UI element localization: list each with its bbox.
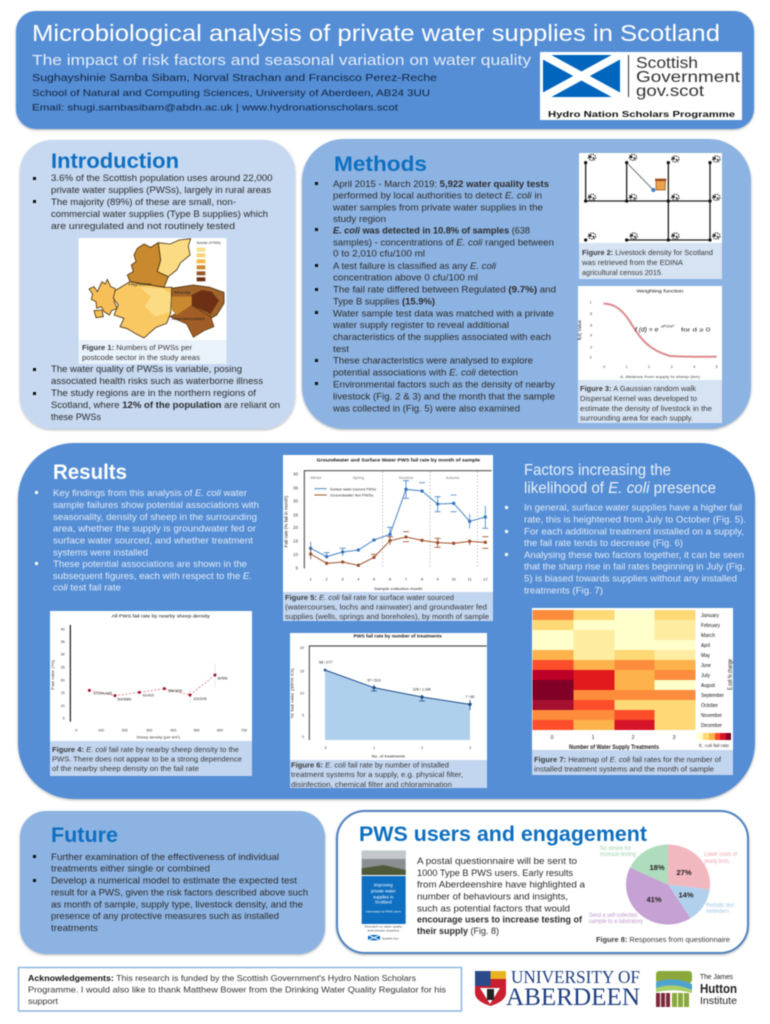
text: methods bullets: potential associations with E. coli detection (333, 368, 518, 378)
figure 6: area chart of fail rate by number of treatments: 58 / 277 (319, 661, 332, 665)
figure 3: weighting function chart: 4 (693, 365, 695, 369)
figure 4: fail rate by sheep density: 54/580 (117, 697, 131, 701)
figure 4: fail rate by sheep density: 600 (217, 728, 223, 732)
figure 7: heatmap by month and number of treatments: 3 (672, 735, 676, 741)
text: future bullets: treatments either single or combined (51, 864, 210, 874)
figure 5: line chart of fail rate by month: 11 (468, 577, 473, 582)
image: survey booklet cover: and private supplies (367, 929, 400, 932)
text: results bullets: surface water sourced, and whether treatment (53, 535, 253, 545)
text: methods bullets: characteristics of the supplies associated with each (333, 332, 551, 342)
image: survey booklet cover (362, 851, 406, 940)
figure 7: heatmap by month and number of treatments: April (701, 643, 710, 649)
figure 7: heatmap by month and number of treatments: February (701, 623, 720, 629)
figure 4: fail rate by sheep density: 40 (61, 628, 65, 632)
caption: figure 4: PWS. There does not appear to be a strong dependence (52, 754, 242, 764)
figure 5: line chart of fail rate by month: Fail rate (% fail in month) (283, 495, 288, 547)
text: results bullets (35, 488, 259, 593)
figure 5: line chart of fail rate by month: Winter (310, 475, 322, 480)
figure 3: weighting function chart: f (d) = e (635, 327, 659, 334)
figure 5: line chart of fail rate by month (283, 455, 493, 592)
logo: Scottish Government and Hydro Nation Scholars Programme (540, 52, 742, 120)
text: methods bullets: These characteristics were analysed to explore (333, 356, 533, 366)
figure 5: line chart of fail rate by month: 8 (421, 577, 424, 582)
image: survey booklet cover: Research on water quality (365, 926, 403, 929)
figure 3: weighting function chart: .4 (589, 334, 592, 338)
caption: figure 5 (283, 592, 493, 621)
image: survey booklet cover: Information for PWS users (366, 909, 401, 913)
caption: figure 3: surrounding area for each supply. (580, 414, 693, 422)
figure 3: weighting function chart: 0 (590, 355, 592, 359)
caption: figure 6: disinfection, chemical filter and chloramination (291, 780, 452, 789)
figure 1: map of PWSs per postcode sector: Aberdeenshire (172, 316, 206, 321)
figure 1: map of PWSs per postcode sector: Highland (128, 281, 151, 286)
figure 6: area chart of fail rate by number of treatments: PWS fail rate by number of treatments (353, 634, 442, 639)
figure 6: area chart of fail rate by number of treatments: 128 / 1,166 (413, 688, 431, 692)
text: introduction bullets top: 3.6% of the Scottish population uses around 22,000 (51, 173, 272, 183)
panel: future (20, 811, 325, 954)
text: methods bullets: Environmental factors such as the density of nearby (333, 380, 555, 390)
text: results bullets: subsequent figures, each with respect to the E. (53, 571, 252, 581)
panel: results (18, 443, 755, 799)
figure 4: fail rate by sheep density: 22/226 (193, 697, 207, 701)
caption: figure 8: Figure 8: Responses from questionnaire (596, 935, 730, 944)
figure 3: weighting function chart: .6 (589, 324, 592, 328)
figure 3: weighting function chart: 1 (626, 365, 628, 369)
caption: figure 6 (290, 760, 487, 789)
caption: figure 1 (78, 340, 226, 364)
figure 4: fail rate by sheep density: 700 (241, 728, 247, 732)
figure 7: heatmap by month and number of treatments: E.coli % change (728, 659, 734, 690)
caption: figure 3 (578, 380, 722, 423)
text: introduction bullets bottom: The study regions are in the northern regions of (51, 388, 256, 398)
caption: figure 3: Dispersal Kernel was developed to (580, 394, 697, 403)
figure 6: area chart of fail rate by number of treatments: 20 (300, 646, 304, 650)
text: methods bullets (315, 179, 556, 413)
figure 4: fail rate by sheep density: 10 (61, 704, 65, 708)
affiliation: School of Natural and Computing Sciences, University of Aberdeen, AB24 3UU (32, 88, 430, 99)
text: questionnaire description (417, 856, 586, 936)
figure 5: line chart of fail rate by month: 3 (342, 577, 345, 582)
figure 4: fail rate by sheep density: 25 (61, 666, 65, 670)
figure 5: line chart of fail rate by month: 2 (326, 577, 329, 582)
caption: figure 7: installed treatment systems and the month of sample (534, 764, 714, 774)
text: results bullets: seasonality, density of sheep in the surrounding (53, 512, 257, 522)
heading: factors increasing E. coli (524, 462, 716, 497)
figure 6: area chart of fail rate by number of treatments: No. of treatments (372, 755, 405, 759)
figure 7: heatmap by month and number of treatments: October (701, 703, 718, 709)
text: results bullets: coli test fail rate (53, 583, 121, 593)
figure 7: heatmap by month and number of treatments: Number of Water Supply Treatments (569, 744, 659, 751)
logo: Scottish Government and Hydro Nation Scholars Programme: gov.scot (636, 83, 705, 100)
text: methods bullets: was collected in (Fig. 5) were also examined (332, 403, 520, 413)
figure 4: fail rate by sheep density: 41/410 (143, 694, 154, 698)
heading: methods: Methods (334, 153, 427, 176)
caption: figure 7 (532, 750, 733, 775)
text: methods bullets: water samples from private water supplies in the (332, 203, 543, 213)
figure 7: heatmap by month and number of treatments: August (701, 683, 715, 689)
figure 8: pie chart of questionnaire responses: 27% (676, 868, 692, 877)
figure 4: fail rate by sheep density: Sheep density (per km²) (137, 736, 180, 740)
text: introduction bullets bottom (33, 364, 280, 422)
figure 4: fail rate by sheep density: 400 (170, 728, 176, 732)
text: factors bullets: 5) is biased towards supplies without any installed (524, 574, 737, 584)
text: factors bullets: For each additional treatment installed on a supply, (524, 526, 744, 536)
figure 8: pie chart of questionnaire responses: No desire for (600, 846, 631, 852)
figure 5: line chart of fail rate by month: 30 (293, 499, 299, 504)
text: methods bullets: study region (333, 214, 386, 224)
figure 6: area chart of fail rate by number of treatments: 10 (300, 691, 304, 695)
caption: figure 5: Figure 5: E. coli fail rate for surface water sourced (285, 593, 454, 602)
text: methods bullets: April 2015 - March 2019: 5,922 water quality tests (333, 179, 549, 189)
text: methods bullets: Type B supplies (15.9%) (333, 297, 435, 307)
text: methods bullets: performed by local authorities to detect E. coli in (333, 191, 542, 201)
figure 8: pie chart of questionnaire responses: Send a self-collected (589, 913, 637, 919)
figure 4: fail rate by sheep density: 30 (61, 653, 65, 657)
figure 7: heatmap by month and number of treatments: March (701, 633, 715, 639)
figure 7: heatmap by month and number of treatments: December (701, 723, 722, 729)
figure 4: fail rate by sheep density: 15 (61, 691, 65, 695)
figure 3: weighting function chart: 3 (671, 365, 673, 369)
figure 6: area chart of fail rate by number of treatments: 15 (300, 669, 304, 673)
figure 4: fail rate by sheep density: 300 (146, 728, 152, 732)
logo: James Hutton Institute: Hutton (700, 981, 737, 996)
text: factors bullets: the fail rate tends to decrease (Fig. 6) (524, 538, 683, 548)
text: methods bullets: E. coli was detected in 10.8% of samples (638 (333, 225, 530, 235)
figure 3: weighting function chart: -d²/2σ² (660, 325, 675, 329)
figure 5: line chart of fail rate by month: Groundwater fed PWSs (330, 494, 374, 498)
figure 4: fail rate by sheep density: 200 (122, 728, 128, 732)
text: factors bullets: In general, surface water supplies have a higher fail (524, 503, 742, 513)
figure 5: line chart of fail rate by month: Sample collection month (374, 586, 422, 591)
figure 4: fail rate by sheep density: All PWS fail rate by nearby sheep density (111, 613, 211, 618)
figure 7: heatmap by month and number of treatments: 0 (550, 735, 554, 741)
text: future bullets (33, 852, 308, 933)
text: questionnaire description: A postal questionnaire will be sent to (417, 856, 577, 866)
text: future bullets: as month of sample, supply type, livestock density, and the (51, 899, 303, 909)
figure 5: line chart of fail rate by month: 12 (483, 577, 488, 582)
text: methods bullets: Water sample test data was matched with a private (333, 308, 554, 318)
figure 7: heatmap by month and number of treatments: June (701, 663, 711, 669)
heading: factors increasing E. coli: likelihood of E. coli presence (524, 480, 716, 497)
text: future bullets: Develop a numerical model to estimate the expected test (51, 876, 297, 886)
text: questionnaire description: 1000 Type B PWS users. Early results (417, 868, 573, 878)
figure 5: line chart of fail rate by month: 15 (293, 538, 299, 543)
image: survey booklet cover: Scottish Gov (382, 936, 399, 940)
figure 6: area chart of fail rate by number of treatments: % fail rate (95% CI) (289, 667, 294, 718)
text: methods bullets: livestock (Fig. 2 & 3) and the month that the sample (333, 391, 555, 401)
figure 8: pie chart of questionnaire responses: Lower costs of (704, 852, 737, 858)
text: methods bullets: A test failure is classified as any E. coli (333, 261, 497, 271)
text: factors bullets (505, 503, 746, 596)
text: introduction bullets top: private water supplies (PWSs), largely in rural areas (51, 185, 271, 195)
text: results bullets: Key findings from this analysis of E. coli water (53, 488, 247, 498)
heading: PWS users and engagement: PWS users and engagement (359, 823, 647, 846)
caption: figure 2: Figure 2: Livestock density for Scotland (582, 248, 713, 257)
figure 5: line chart of fail rate by month: 7 (405, 577, 408, 582)
text: introduction bullets top: are unregulated and not routinely tested (51, 221, 235, 231)
text: introduction bullets bottom: The water quality of PWSs is variable, posing (51, 364, 242, 374)
figure 3: weighting function chart: .2 (589, 345, 592, 349)
figure 6: area chart of fail rate by number of treatments: 1 (373, 746, 375, 750)
logo: University of Aberdeen (475, 967, 640, 1011)
caption: figure 3: Figure 3: A Gaussian random walk (580, 384, 696, 393)
caption: figure 2: agricultural census 2015. (582, 268, 663, 277)
figure 8: pie chart of questionnaire responses: yearly tests (704, 859, 729, 865)
text: questionnaire description: their supply (Fig. 8) (417, 926, 499, 936)
text: questionnaire description: from Aberdeenshire have highlighted a (417, 880, 586, 890)
caption: figure 3: estimate the density of livestock in the (580, 404, 712, 413)
text: questionnaire description: encourage users to increase testing of (417, 914, 583, 924)
figure 8: pie chart of questionnaire responses: Periodic test (706, 903, 734, 909)
text: results bullets: area, whether the supply is groundwater fed or (53, 524, 256, 534)
caption: figure 2: was retrieved from the EDINA (581, 258, 684, 267)
figure 3: weighting function chart: 5 (716, 365, 718, 369)
text: methods bullets: test (333, 344, 349, 354)
text: results bullets: These potential associations are shown in the (53, 559, 247, 569)
text: introduction bullets top (33, 173, 272, 231)
text: future bullets: treatments (51, 923, 98, 933)
figure 7: heatmap by month and number of treatments (532, 608, 734, 751)
figure 7: heatmap by month and number of treatments: January (701, 613, 719, 619)
figure 6: area chart of fail rate by number of treatments: 57 / 513 (367, 679, 381, 683)
text: questionnaire description: number of behaviours and insights, (417, 891, 568, 901)
figure 3: weighting function chart: d, distance from supply to sheep (km) (620, 374, 701, 379)
figure 3: weighting function chart: Weighting function (637, 288, 684, 293)
figure 4: fail rate by sheep density: 0 (75, 728, 77, 732)
logo: James Hutton Institute: The James (700, 972, 733, 981)
text box: acknowledgements (18, 968, 462, 1011)
text: methods bullets: water supply register to reveal additional (332, 320, 509, 330)
figure 8: pie chart of questionnaire responses: 18% (649, 863, 665, 872)
image: survey booklet cover: Improving (374, 882, 393, 887)
caption: figure 6: treatment systems for a supply, e.g. physical filter, (291, 770, 463, 779)
figure 5: line chart of fail rate by month: Summer (398, 475, 414, 480)
text: methods bullets: The fail rate differed between Regulated (9.7%) and (333, 285, 556, 295)
figure 5: line chart of fail rate by month: Autumn (446, 475, 460, 480)
figure 4: fail rate by sheep density: 472/4,445 (93, 692, 112, 696)
text: results bullets: sample failures show potential associations with (53, 500, 259, 510)
figure 3: weighting function chart (577, 286, 722, 380)
text: future bullets: Further examination of the effectiveness of individual (51, 852, 279, 862)
caption: figure 2 (579, 243, 722, 279)
authors: Sughayshinie Samba Sibam, Norval Strachan and Francisco Perez-Reche (32, 72, 437, 84)
figure 5: line chart of fail rate by month: 20 (293, 525, 299, 530)
figure 3: weighting function chart: 0 (603, 365, 605, 369)
figure 7: heatmap by month and number of treatments: September (701, 693, 724, 699)
figure 7: heatmap by month and number of treatments: 2 (631, 735, 635, 741)
figure 8: pie chart of questionnaire responses: 14% (678, 890, 694, 900)
logo: University of Aberdeen: ABERDEEN (506, 984, 640, 1011)
caption: figure 1: Figure 1: Numbers of PWSs per (82, 343, 192, 352)
figure 6: area chart of fail rate by number of treatments: 0 (302, 735, 304, 739)
figure 5: line chart of fail rate by month: Surface water sourced PWSs (330, 487, 376, 491)
panel: methods (302, 139, 751, 429)
figure 5: line chart of fail rate by month: 6 (389, 577, 392, 582)
text: introduction bullets bottom: these PWSs (51, 412, 101, 422)
figure 4: fail rate by sheep density: 9/55 (217, 676, 227, 680)
figure 8: pie chart of questionnaire responses: sample to a laboratory (589, 919, 643, 925)
heading: results: Results (53, 461, 127, 484)
text: methods bullets: concentration above 0 cfu/100 ml (333, 273, 478, 283)
figure 7: heatmap by month and number of treatments: July (701, 673, 710, 679)
text: factors bullets: rate, this is heightened from July to October (Fig. 5). (524, 514, 746, 524)
logo: University of Aberdeen: UNIVERSITY OF (511, 967, 640, 987)
figure 3: weighting function chart: for d ≥ 0 (681, 328, 710, 334)
panel: introduction (20, 140, 295, 429)
image: survey booklet cover: private water (371, 888, 396, 893)
figure 5: line chart of fail rate by month: 5 (373, 577, 376, 582)
text box: acknowledgements: support (28, 996, 59, 1006)
text: future bullets: presence of any protective measures such as installed (51, 911, 279, 921)
caption: figure 6: Figure 6: E. coli fail rate by number of installed (291, 760, 449, 770)
figure 5: line chart of fail rate by month: 4 (357, 577, 360, 582)
logo: Scottish Government and Hydro Nation Scholars Programme: Scottish (636, 55, 698, 72)
logo: James Hutton Institute: Institute (700, 996, 737, 1007)
caption: figure 5: (watercourses, lochs and rainwater) and groundwater fed (285, 602, 487, 612)
heading: future: Future (51, 824, 118, 847)
caption: figure 4: of the nearby sheep density on the fail rate (52, 764, 199, 773)
figure 3: weighting function chart: 1 (590, 300, 592, 304)
figure 5: line chart of fail rate by month: Groundwater and Surface Water PWS fail rate by month of sample (317, 458, 480, 463)
caption: figure 4: Figure 4: E. coli fail rate by nearby sheep density to the (52, 745, 239, 754)
figure 5: line chart of fail rate by month: Spring (353, 475, 364, 480)
heading: factors increasing E. coli: Factors increasing the (524, 462, 671, 479)
figure 8: pie chart of questionnaire responses: 41% (646, 895, 662, 904)
figure 1: map of PWSs per postcode sector (78, 238, 226, 340)
caption: figure 7: Figure 7: Heatmap of E. coli fail rates for the number of (534, 755, 722, 764)
text box: acknowledgements: Acknowledgements: This research is funded by the Scottish Government's Hydro Nation Scholars (28, 973, 416, 983)
figure 8: pie chart of questionnaire responses: increase testing (600, 852, 636, 858)
panel: header (16, 11, 754, 129)
logo: Scottish Government and Hydro Nation Scholars Programme: Government (636, 69, 741, 86)
figure 5: line chart of fail rate by month: 25 (293, 512, 299, 517)
figure 6: area chart of fail rate by number of treatments: 5 (302, 713, 304, 717)
figure 4: fail rate by sheep density: Fail rate (%) (50, 659, 55, 690)
caption: figure 1: postcode sector in the study areas (82, 353, 200, 362)
figure 5: line chart of fail rate by month: 35 (293, 485, 299, 490)
text: methods bullets: 0 to 2,010 cfu/100 ml (333, 249, 425, 259)
text: introduction bullets bottom: associated health risks such as waterborne illness (51, 376, 263, 386)
figure 3: weighting function chart: f(d) Value (577, 319, 582, 340)
text: methods bullets: samples) - concentrations of E. coli ranged between (333, 237, 554, 247)
figure 5: line chart of fail rate by month: 5 (296, 566, 299, 571)
figure 6: area chart of fail rate by number of treatments: 7 / 80 (465, 695, 475, 699)
panel: PWS users and engagement (337, 811, 748, 953)
logo: Scottish Government and Hydro Nation Scholars Programme: Hydro Nation Scholars Programme (548, 109, 735, 119)
figure 7: heatmap by month and number of treatments: May (701, 653, 710, 659)
figure 2: livestock grid diagram (579, 153, 722, 243)
caption: figure 5: supplies (wells, springs and boreholes), by month of sample (285, 612, 489, 621)
figure 4: fail rate by sheep density: 100 (98, 728, 104, 732)
image: survey booklet cover: Scotland (375, 900, 392, 905)
figure 4: fail rate by sheep density: 20 (61, 678, 65, 682)
figure 5: line chart of fail rate by month: 9 (437, 577, 440, 582)
figure 5: line chart of fail rate by month: 1 (310, 577, 313, 582)
image: survey booklet cover: supplies in (373, 894, 394, 899)
contact details: Email: shugi.sambasibam@abdn.ac.uk | www.hydronationscholars.scot (32, 102, 398, 114)
figure 7: heatmap by month and number of treatments: November (701, 713, 722, 719)
figure 4: fail rate by sheep density: 38/300 (168, 689, 182, 693)
figure 5: line chart of fail rate by month: 10 (451, 577, 457, 582)
text: factors bullets: treatments (Fig. 7) (524, 586, 603, 596)
figure 5: line chart of fail rate by month: 10 (293, 552, 299, 557)
figure 6: area chart of fail rate by number of treatments: 3 (469, 746, 471, 750)
text: future bullets: result for a PWS, given the risk factors described above such (51, 887, 308, 897)
caption: figure 4 (50, 741, 252, 776)
figure 1: map of PWSs per postcode sector: Moray (174, 289, 191, 294)
text: introduction bullets top: commercial water supplies (Type B supplies) which (51, 209, 268, 219)
figure 8: pie chart of questionnaire responses: reminders (706, 909, 729, 915)
figure 4: fail rate by sheep density: 500 (194, 728, 200, 732)
figure 6: area chart of fail rate by number of treatments: 2 (421, 746, 423, 750)
figure 4: fail rate by sheep density: 5 (63, 717, 65, 721)
text: introduction bullets bottom: Scotland, where 12% of the population are reliant on (51, 400, 280, 410)
figure 6: area chart of fail rate by number of treatments: 0 (325, 746, 327, 750)
figure 3: weighting function chart: 2 (648, 365, 650, 369)
figure 6: area chart of fail rate by number of treatments (289, 633, 487, 760)
heading: introduction: Introduction (51, 150, 179, 173)
figure 3: weighting function chart: .8 (589, 312, 592, 316)
figure 4: fail rate by sheep density: 35 (61, 640, 65, 644)
text: factors bullets: Analysing these two factors together, it can be seen (524, 550, 744, 560)
title: Microbiological analysis of private water supplies in Scotland (32, 20, 720, 46)
figure 1: map of PWSs per postcode sector: Number of PWSs (197, 241, 221, 245)
subtitle: The impact of risk factors and seasonal variation on water quality (32, 52, 532, 69)
figure 5: line chart of fail rate by month: 40 (293, 472, 299, 477)
text box: acknowledgements: Programme. I would also like to thank Matthew Bower from the Drinking Water Quality Regulator for his (28, 984, 446, 994)
text: questionnaire description: such as potential factors that would (417, 903, 570, 913)
figure 7: heatmap by month and number of treatments: E. coli fail rate (699, 743, 730, 748)
figure 7: heatmap by month and number of treatments: 1 (591, 735, 595, 741)
text: introduction bullets top: The majority (89%) of these are small, non- (51, 197, 236, 207)
figure 8: pie chart of questionnaire responses (589, 844, 737, 925)
logo: James Hutton Institute (656, 971, 737, 1007)
text: factors bullets: that the sharp rise in fail rates beginning in July (Fig. (524, 562, 745, 572)
text: results bullets: systems were installed (53, 547, 148, 557)
figure 4: fail rate by sheep density (50, 611, 252, 741)
